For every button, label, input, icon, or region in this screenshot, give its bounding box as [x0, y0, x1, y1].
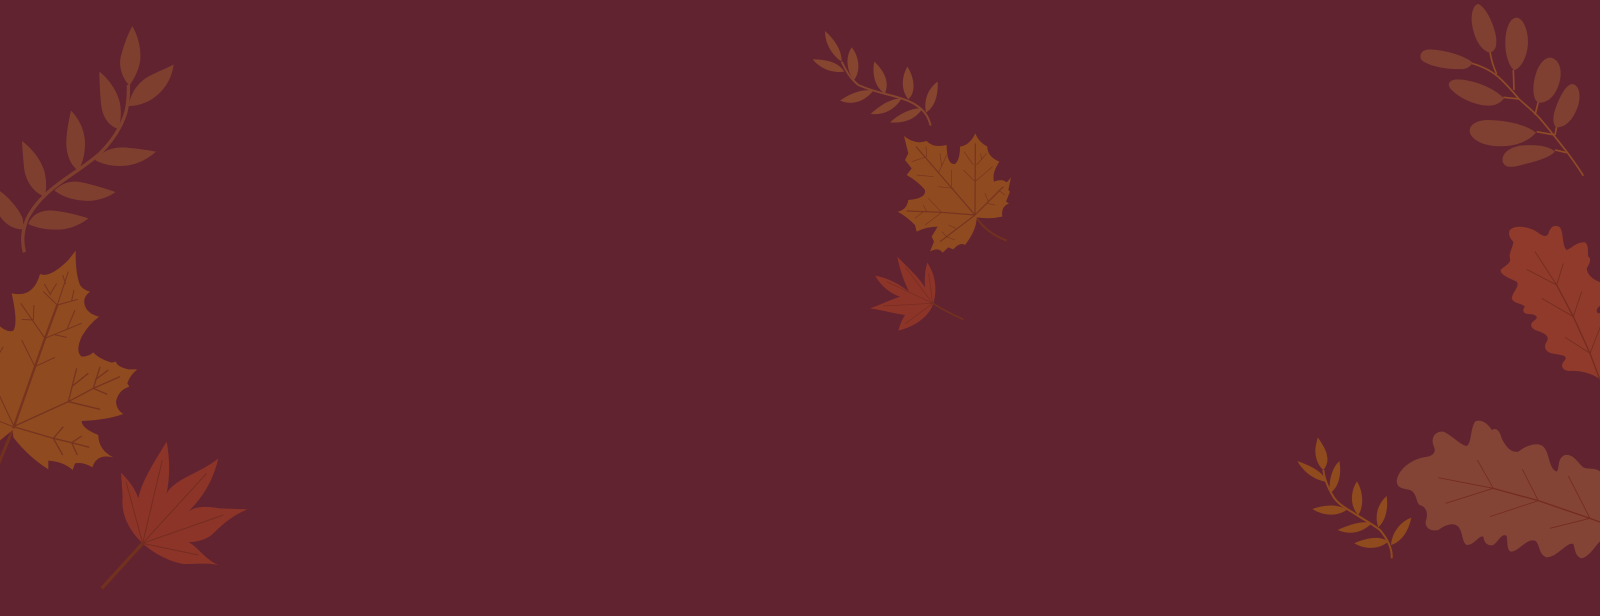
leaf: brown oak, bottom right: [1397, 421, 1600, 558]
leaf: red maple, centre: [870, 257, 963, 331]
branch: small top centre: [813, 31, 938, 126]
branch: large top-left: [0, 26, 174, 252]
leaf: large orange maple, left: [0, 251, 137, 470]
leaf: red oak, right edge: [1501, 226, 1600, 381]
leaf: red maple, bottom left: [102, 442, 247, 588]
branch: small orange, bottom right: [1297, 437, 1411, 558]
branch: top right, rounded leaves: [1420, 4, 1583, 176]
leaf: orange maple, centre: [898, 133, 1011, 253]
